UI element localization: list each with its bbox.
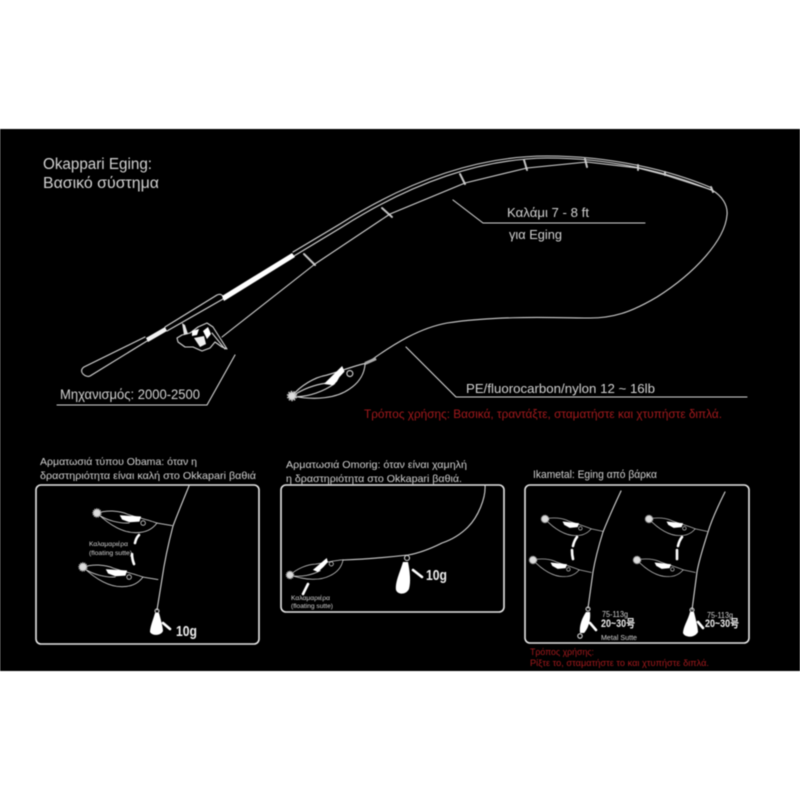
- rod label: για Eging: [509, 228, 562, 242]
- Ikametal usage note: Ρίξτε το, σταματήστε το και χτυπήστε διπλά.: [530, 658, 709, 669]
- usage note: Τρόπος χρήσης: Βασικά, τραντάξτε, σταματήστε και χτυπήστε διπλά.: [364, 409, 722, 421]
- left upper lure: [539, 515, 604, 542]
- left weight label: 20~30号: [601, 617, 635, 630]
- lure label: (floating sutte): [89, 550, 132, 557]
- right upper lure: [643, 515, 708, 542]
- upper lure: [91, 508, 173, 539]
- main line: [343, 485, 485, 560]
- lure label: Καλαμαριέρα: [291, 594, 330, 602]
- fishing rod illustration: [57, 156, 747, 414]
- right arrows: [677, 537, 682, 559]
- right weight label: [698, 610, 739, 630]
- reel label: [57, 355, 235, 405]
- heading: Omorig rig: η δραστηριότητα στο Okkapari βαθιά.: [286, 473, 462, 485]
- lure label: (floating sutte): [291, 603, 333, 610]
- weight label: [163, 623, 197, 640]
- lure label: [89, 540, 132, 557]
- rod blank: [293, 156, 712, 256]
- left weight label: [590, 609, 637, 642]
- main lure (squid jig): [285, 352, 383, 414]
- weight label: 10g: [426, 568, 447, 584]
- lure: [285, 554, 346, 588]
- left arrows: [572, 537, 577, 559]
- reel label: Μηχανισμός: 2000-2500: [60, 387, 200, 402]
- panel: Ikametal rig: [525, 469, 749, 643]
- Ikametal usage note: Τρόπος χρήσης:: [530, 647, 594, 658]
- lure label: Καλαμαριέρα: [89, 540, 128, 548]
- main line: [157, 486, 189, 610]
- heading: Ikametal: Ikametal: Eging από βάρκα: [533, 469, 658, 481]
- Ikametal usage note: [530, 647, 709, 669]
- heading: Obama rig: [40, 456, 256, 482]
- left main line: [588, 491, 621, 608]
- right weight label: 75-113g: [707, 610, 733, 620]
- title: Βασικό σύστημα: [43, 175, 159, 192]
- rod label: [453, 200, 645, 242]
- left weight label: 75-113g: [602, 609, 628, 619]
- rod guides: [304, 159, 713, 265]
- spinning reel: [177, 323, 227, 351]
- rod handle: [82, 253, 295, 376]
- panel: Omorig rig: [281, 459, 504, 612]
- arrows to lures: [132, 535, 139, 564]
- left lower lure: [527, 556, 592, 583]
- heading: Omorig rig: [286, 459, 467, 485]
- line label: [406, 347, 747, 397]
- line label: PE/fluorocarbon/nylon 12 ~ 16lb: [466, 382, 655, 396]
- right lower lure: [631, 556, 696, 583]
- lower lure: [77, 562, 159, 593]
- fishing line from reel to lure: [222, 162, 727, 361]
- right weight label: 20~30号: [705, 617, 739, 630]
- panel: Obama rig: [36, 456, 259, 644]
- heading: Obama rig: Αρματωσιά τύπου Obama: όταν η: [40, 456, 197, 468]
- title: [43, 156, 159, 192]
- weight label: 10g: [176, 624, 197, 640]
- sinker: [150, 609, 163, 635]
- sinker: [396, 556, 410, 594]
- title: Okappari Eging:: [43, 156, 152, 173]
- metal sutte: [578, 607, 590, 638]
- lure label: [291, 584, 333, 610]
- right sinker: [683, 608, 698, 637]
- right main line: [692, 492, 725, 610]
- left weight label: Metal Sutte: [601, 633, 637, 642]
- heading: Omorig rig: Αρματωσιά Omorig: όταν είναι χαμηλή: [286, 459, 467, 471]
- black background band: [0, 129, 800, 671]
- heading: Obama rig: δραστηριότητα είναι καλή στο Okkapari βαθιά: [40, 470, 256, 482]
- rod label: Καλάμι 7 - 8 ft: [507, 206, 590, 220]
- weight label: [413, 568, 447, 584]
